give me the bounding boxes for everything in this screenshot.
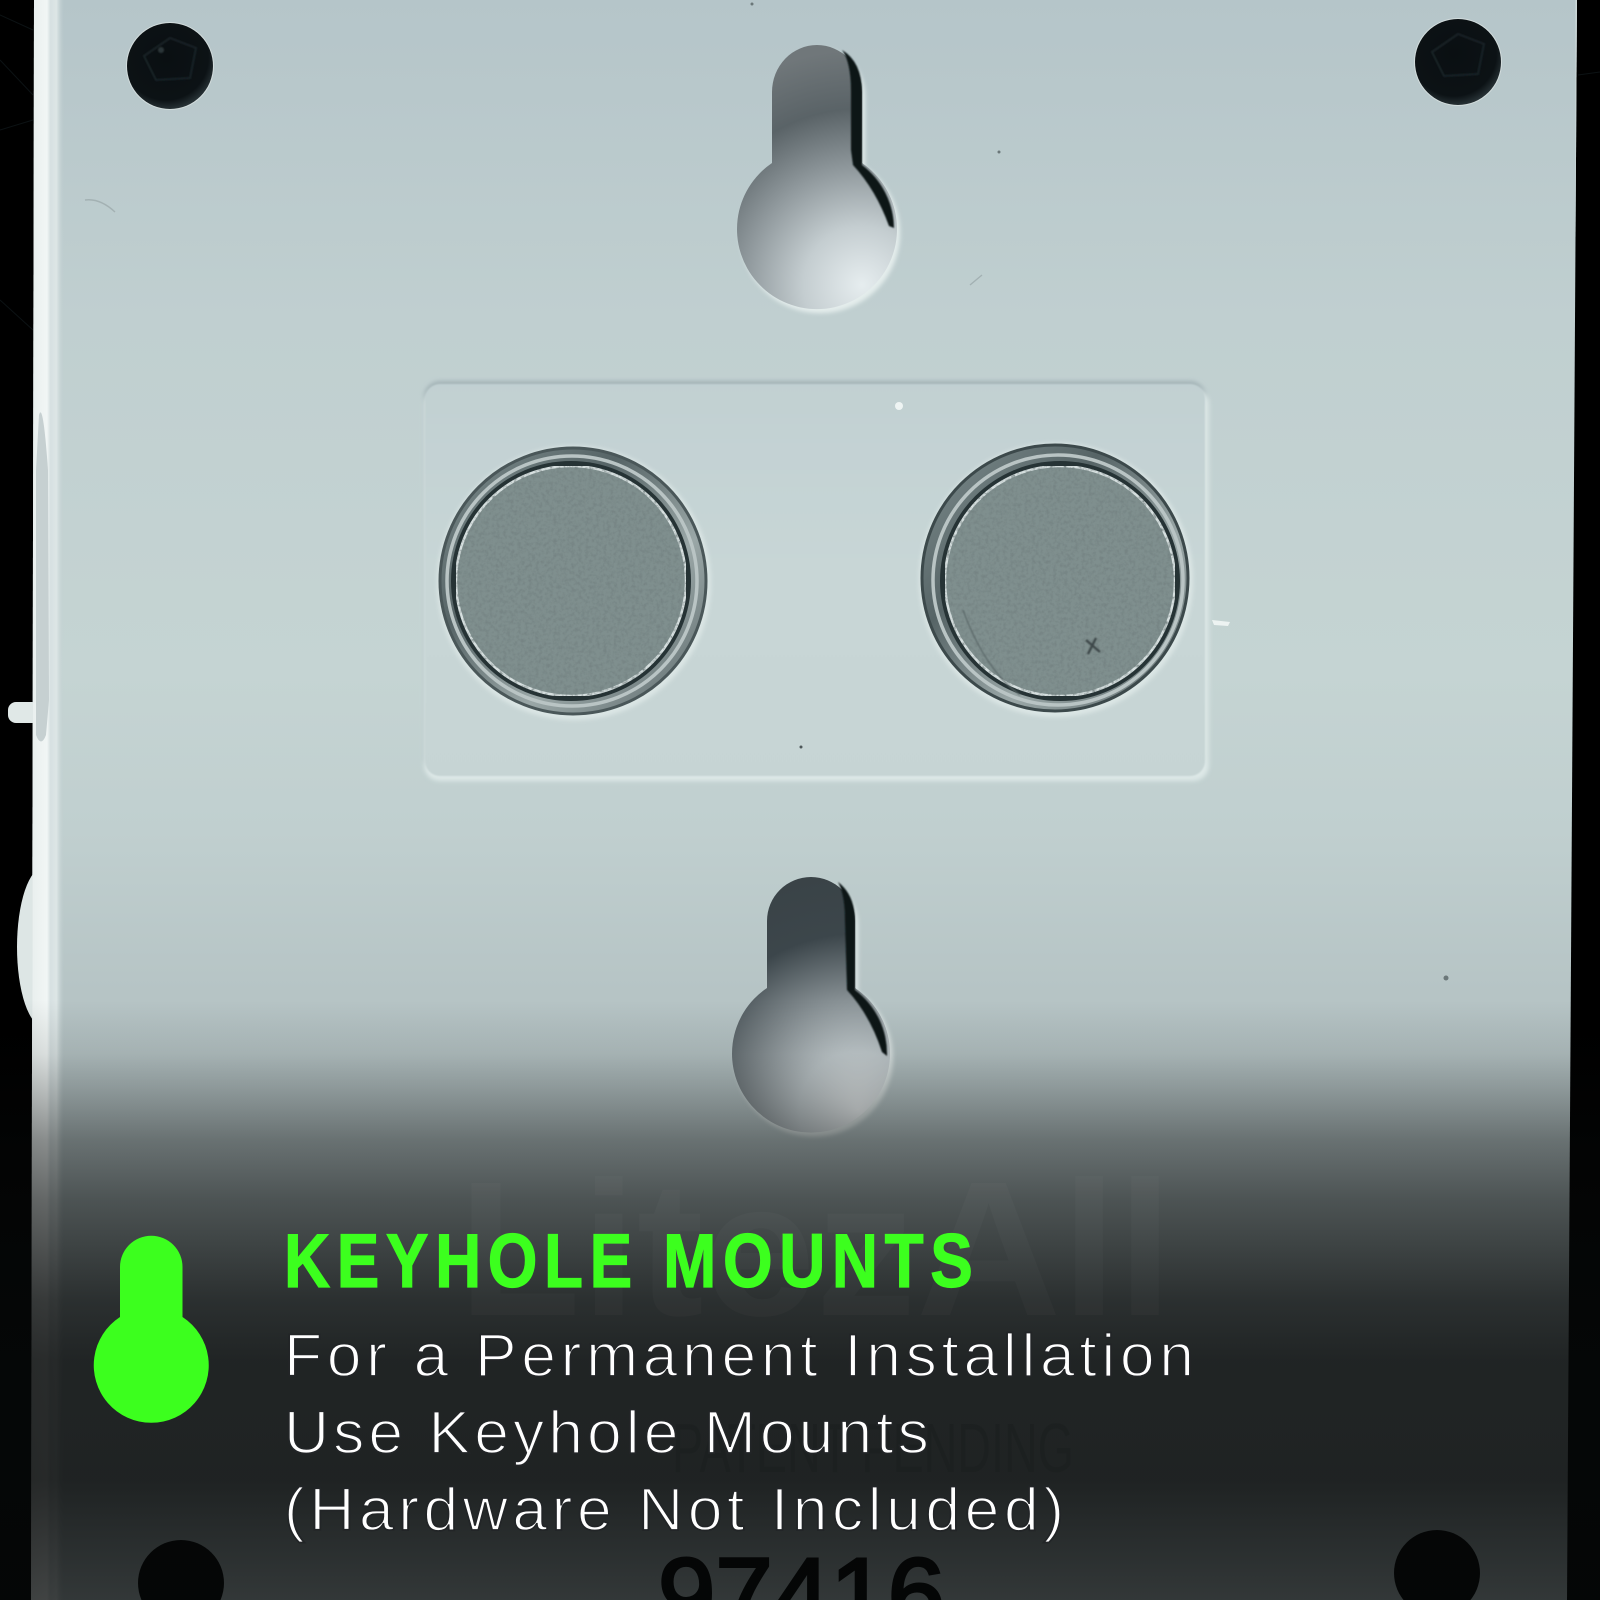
description text: For a Permanent Installation bbox=[284, 1322, 1194, 1389]
magnet: left bbox=[437, 446, 711, 720]
description text: Use Keyhole Mounts bbox=[284, 1399, 929, 1466]
magnet recess bbox=[424, 381, 1230, 781]
description text: (Hardware Not Included) bbox=[284, 1476, 1064, 1543]
magnet: right bbox=[919, 443, 1193, 717]
keyhole: top bbox=[737, 45, 900, 313]
screw: top left bbox=[126, 22, 214, 110]
icon: keyhole bbox=[94, 1236, 209, 1423]
dark gradient overlay bbox=[0, 1000, 1600, 1600]
screw: bottom right bbox=[1394, 1530, 1480, 1600]
side tab and bump bbox=[8, 702, 71, 1027]
description text bbox=[284, 1322, 1194, 1543]
small surface marks bbox=[85, 2, 1448, 980]
screw: top right bbox=[1414, 18, 1502, 106]
keyhole: bottom bbox=[732, 877, 893, 1137]
screw: bottom left bbox=[138, 1540, 224, 1600]
heading: KEYHOLE MOUNTS bbox=[284, 1218, 973, 1303]
moulded patent text: PATENT PENDING bbox=[672, 1409, 1074, 1487]
moulded logo watermark: LitezAll bbox=[458, 1141, 1173, 1356]
